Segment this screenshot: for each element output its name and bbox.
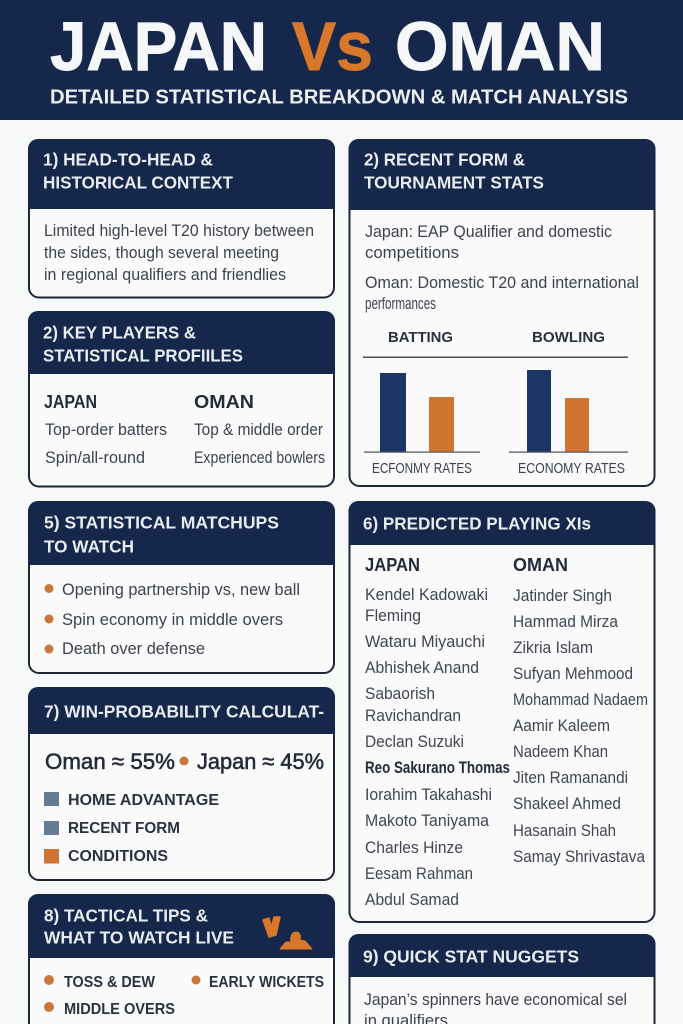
text: history: [44, 222, 314, 284]
subtitle: DETAILED STATISTICAL BREAKDOWN & MATCH ANALYSIS: [50, 86, 628, 108]
stat: win percentages: [45, 749, 324, 774]
heading: head-to-head: HISTORICAL CONTEXT: [43, 172, 233, 192]
heading: nuggets: 9) QUICK STAT NUGGETS: [363, 946, 579, 966]
list: Oman XI: Sufyan Mehmood: [513, 665, 633, 683]
heading: matchups: TO WATCH: [44, 536, 134, 556]
bar chart: batting: [364, 373, 480, 453]
heading: head-to-head: 1) HEAD-TO-HEAD &: [43, 149, 213, 169]
title: [50, 8, 605, 85]
panel: tactical tips: [28, 894, 335, 1024]
column: Oman players: [194, 392, 325, 467]
panel: head-to-head: [28, 139, 335, 298]
list: Japan XI: Abdul Samad: [365, 891, 459, 909]
text: form notes: performances: [365, 295, 436, 313]
title: JAPAN: [50, 8, 267, 85]
bullet list: tips: TOSS & DEW: [64, 974, 156, 991]
list: Japan XI: JAPAN: [365, 555, 420, 575]
list: Oman XI: [513, 555, 648, 866]
column: Oman players: Top & middle order: [194, 421, 323, 439]
list: Oman XI: Jiten Ramanandi: [513, 769, 628, 787]
legend: win factors: RECENT FORM: [68, 820, 180, 837]
title: Vs: [292, 8, 373, 85]
list: Japan XI: Iorahim Takahashi: [365, 786, 492, 804]
list: Japan XI: Reo Sakurano Thomas: [365, 759, 510, 777]
column: Japan players: JAPAN: [44, 392, 97, 412]
stat: win percentages: Japan ≈ 45%: [197, 749, 324, 774]
list: Oman XI: Samay Shrivastava: [513, 848, 646, 866]
list: Japan XI: Charles Hinze: [365, 839, 463, 857]
text: form notes: [365, 223, 639, 313]
text: form notes: Oman: Domestic T20 and international: [365, 274, 639, 292]
list: Oman XI: Hammad Mirza: [513, 613, 619, 631]
panel: recent form: [348, 139, 656, 486]
chart label: bowling: ECONOMY RATES: [518, 461, 625, 477]
bar chart: bowling: [509, 370, 628, 453]
text: history: the sides, though several meeting: [44, 244, 279, 262]
text: form notes: Japan: EAP Qualifier and domestic: [365, 223, 612, 241]
bullet list: tips: [44, 974, 324, 1018]
chart heading: batting: BATTING: [388, 329, 453, 346]
heading: tactical tips: WHAT TO WATCH LIVE: [44, 927, 234, 947]
heading: key players: STATISTICAL PROFIILES: [43, 345, 243, 365]
list: Oman XI: OMAN: [513, 555, 568, 575]
bullet list: tips: EARLY WICKETS: [209, 974, 324, 991]
text: nuggets: [364, 991, 627, 1024]
heading: recent form: 2) RECENT FORM &: [364, 149, 525, 169]
title: OMAN: [395, 8, 605, 85]
column: Japan players: Spin/all-round: [45, 449, 145, 467]
column: Japan players: Top-order batters: [45, 421, 167, 439]
panel: statistical matchups: [28, 501, 335, 673]
legend: win factors: [44, 792, 219, 865]
heading: recent form: [364, 149, 544, 192]
icon: cricket gear: [263, 917, 312, 949]
panel: key players: [28, 311, 335, 486]
bullet list: matchups: Spin economy in middle overs: [62, 611, 283, 629]
list: Oman XI: Mohammad Nadaem: [513, 691, 648, 709]
list: Oman XI: Nadeem Khan: [513, 743, 608, 761]
heading: matchups: [44, 512, 279, 556]
list: Oman XI: Aamir Kaleem: [513, 717, 610, 735]
text: history: in regional qualifiers and friendlies: [44, 266, 286, 284]
heading: playing XIs: 6) PREDICTED PLAYING XIs: [363, 513, 591, 533]
heading: tactical tips: 8) TACTICAL TIPS &: [44, 905, 208, 925]
list: Japan XI: Ravichandran: [365, 707, 461, 725]
heading: win probability: 7) WIN-PROBABILITY CALCULAT-: [44, 701, 324, 721]
legend: win factors: CONDITIONS: [68, 848, 168, 865]
list: Japan XI: Declan Suzuki: [365, 733, 464, 751]
text: history: Limited high-level T20 history between: [44, 222, 314, 240]
legend: win factors: HOME ADVANTAGE: [68, 792, 219, 809]
list: Oman XI: Hasanain Shah: [513, 822, 616, 840]
list: Japan XI: Wataru Miyauchi: [365, 633, 485, 651]
bullet list: tips: MIDDLE OVERS: [64, 1001, 175, 1018]
list: Japan XI: Fleming: [365, 607, 421, 625]
header banner: [0, 0, 683, 120]
list: Japan XI: Sabaorish: [365, 685, 435, 703]
column: Oman players: Experienced bowlers: [194, 449, 325, 467]
text: form notes: competitions: [365, 244, 459, 262]
list: Japan XI: Abhishek Anand: [365, 659, 479, 677]
list: Japan XI: Kendel Kadowaki: [365, 586, 488, 604]
heading: key players: 2) KEY PLAYERS &: [43, 322, 196, 342]
panel: quick stat nuggets: [348, 934, 656, 1024]
list: Oman XI: Shakeel Ahmed: [513, 795, 621, 813]
panel: win probability: [28, 687, 335, 880]
list: Oman XI: Jatinder Singh: [513, 587, 612, 605]
list: Japan XI: Eesam Rahman: [365, 865, 473, 883]
bullet list: matchups: [44, 581, 300, 658]
stat: win percentages: Oman ≈ 55%: [45, 749, 175, 774]
panel: predicted playing XIs: [348, 501, 656, 922]
column: Japan players: [44, 392, 167, 467]
list: Oman XI: Zikria Islam: [513, 639, 593, 657]
heading: recent form: TOURNAMENT STATS: [364, 172, 544, 192]
list: Japan XI: [365, 555, 510, 909]
heading: key players: [43, 322, 243, 365]
bullet list: matchups: Opening partnership vs, new ball: [62, 581, 300, 599]
list: Japan XI: Makoto Taniyama: [365, 812, 490, 830]
column: Oman players: OMAN: [194, 392, 254, 412]
chart heading: bowling: BOWLING: [532, 329, 605, 346]
heading: tactical tips: [44, 905, 234, 947]
text: nuggets: Japan’s spinners have economical sel: [364, 991, 627, 1009]
chart label: batting: ECFONMY RATES: [372, 461, 472, 477]
bullet list: matchups: Death over defense: [62, 640, 205, 658]
heading: head-to-head: [43, 149, 233, 192]
heading: matchups: 5) STATISTICAL MATCHUPS: [44, 512, 279, 532]
